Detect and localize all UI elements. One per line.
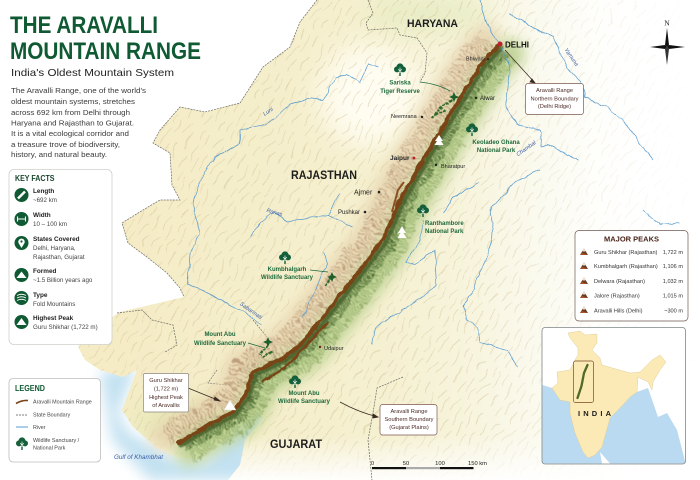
- icon: highest peak: [14, 315, 28, 329]
- inset map: India: [542, 328, 686, 464]
- panel: major peaks: MAJOR PEAKS: [604, 234, 659, 244]
- river labels: [114, 47, 579, 461]
- key fact entries: Type: [33, 292, 48, 299]
- callout: southern boundary: Southern Boundary: [384, 417, 434, 423]
- peak row: Kumbhalgarh: 1,106 m: [663, 264, 683, 270]
- river labels: Sabarmati: [238, 301, 263, 321]
- park labels: National Park: [477, 148, 516, 154]
- panel: key facts: [9, 170, 112, 344]
- subtitle: India's Oldest Mountain System: [11, 67, 174, 79]
- state boundaries: [117, 0, 427, 480]
- peak row: Aravalli Hills: ~300 m: [664, 308, 683, 314]
- protected forest patches: [260, 100, 452, 358]
- icons: parks and reserves: [263, 63, 478, 388]
- intro text: across 692 km from Delhi through: [11, 109, 130, 117]
- park labels: Ranthambore: [425, 221, 464, 227]
- sea: Gulf of Khambhat: [100, 366, 268, 480]
- mountain range: [166, 39, 510, 451]
- key fact entries: Length: [33, 188, 54, 195]
- park labels: Wildlife Sanctuary: [261, 275, 314, 281]
- panel: major peaks: [575, 230, 688, 321]
- key fact entries: States Covered: [33, 236, 80, 243]
- key fact entries: [33, 188, 98, 331]
- callout: Guru Shikhar: Guru Shikhar: [149, 378, 183, 384]
- icon: type: [14, 291, 28, 305]
- park labels: Mount Abu: [204, 332, 236, 338]
- state labels: HARYANA: [407, 18, 458, 30]
- rivers: [188, 0, 680, 367]
- legend: wildlife sanctuary: Wildlife Sanctuary /: [33, 438, 80, 444]
- river labels: Ranas: [266, 208, 283, 218]
- callout: northern boundary: [526, 84, 584, 114]
- park labels: Tiger Reserve: [380, 89, 420, 95]
- park labels: Wildlife Sanctuary: [278, 399, 331, 405]
- intro text: The Aravalli Range, one of the world's: [11, 87, 147, 95]
- peak row: Delwara: 1,032 m: [663, 279, 683, 285]
- scale bar: 50: [403, 461, 409, 467]
- peak marker: Guru Shikhar: [224, 400, 236, 410]
- city labels: Bharatpur: [441, 164, 465, 170]
- scale bar: [371, 461, 487, 469]
- scale bar: 150 km: [468, 461, 487, 467]
- peak row: Delwara: [580, 278, 683, 285]
- peak row: Kumbhalgarh: [580, 262, 683, 270]
- park labels: Keoladeo Ghana: [472, 140, 520, 146]
- key fact entries: 10 – 100 km: [33, 221, 67, 228]
- park labels: Wildlife Sanctuary: [194, 341, 247, 347]
- panel: key facts: KEY FACTS: [15, 174, 55, 183]
- intro text: a treasure trove of biodiversity,: [11, 141, 120, 149]
- icon: width: [14, 212, 28, 226]
- intro text: oldest mountain systems, stretches: [11, 98, 135, 106]
- city labels: Bhiwadi: [466, 56, 485, 62]
- peak row: Guru Shikhar: [580, 248, 683, 256]
- icon: formed: [14, 268, 28, 282]
- peak row: Delwara: Delwara (Rajasthan): [594, 279, 645, 285]
- city labels: [319, 40, 529, 352]
- intro text: Haryana and Rajasthan to Gujarat.: [11, 120, 134, 128]
- title: [10, 12, 201, 65]
- callout: southern boundary: Aravalli Range: [390, 409, 428, 415]
- inset map: India: INDIA: [578, 409, 612, 418]
- callout: southern boundary: (Gujarat Plains): [389, 425, 429, 431]
- key fact entries: Highest Peak: [33, 315, 74, 322]
- legend: state boundary: State Boundary: [33, 412, 70, 418]
- park labels: National Park: [425, 229, 464, 235]
- peak row: Aravalli Hills: Aravalli Hills (Delhi): [594, 308, 643, 314]
- peak row: Jalore: 1,015 m: [663, 294, 683, 300]
- key fact entries: Rajasthan, Gujarat: [33, 254, 85, 261]
- river labels: Chambal: [516, 140, 538, 158]
- city labels: Jaipur: [390, 155, 410, 162]
- peak row: Aravalli Hills: [580, 306, 683, 314]
- intro text: [11, 87, 147, 159]
- intro text: It is a vital ecological corridor and: [11, 130, 129, 138]
- intro text: history, and natural beauty.: [11, 151, 107, 159]
- state labels: [270, 18, 458, 451]
- callout: northern boundary: Northern Boundary: [530, 96, 579, 102]
- city labels: DELHI: [505, 40, 529, 50]
- city labels: Ajmer: [354, 190, 373, 196]
- key fact entries: Fold Mountains: [33, 301, 75, 308]
- legend: wildlife sanctuary: [16, 437, 80, 452]
- key fact entries: ~1.5 Billion years ago: [33, 277, 93, 284]
- legend: river: River: [33, 425, 46, 431]
- key fact entries: Width: [33, 212, 51, 219]
- callout: Guru Shikhar: (1,722 m): [154, 386, 178, 392]
- title: THE ARAVALLI: [10, 12, 158, 39]
- scale bar: 100: [435, 461, 445, 467]
- park labels: Mount Abu: [288, 391, 320, 397]
- peak marker: white tree near Jaipur: [434, 135, 444, 145]
- panel: legend: LEGEND: [15, 384, 45, 393]
- peak row: Jalore: Jalore (Rajasthan): [594, 294, 640, 300]
- peak row: Kumbhalgarh: Kumbhalgarh (Rajasthan): [594, 264, 658, 270]
- city labels: Udaipur: [324, 346, 344, 352]
- callout: Guru Shikhar: Highest Peak: [149, 395, 183, 401]
- peak row: Guru Shikhar: Guru Shikhar (Rajasthan): [594, 250, 658, 256]
- legend: wildlife sanctuary: National Park: [33, 446, 66, 452]
- icon: states covered: [14, 236, 28, 250]
- park labels: Sariska: [389, 80, 411, 86]
- compass: [650, 18, 685, 65]
- river labels: Yamuna: [563, 47, 579, 68]
- key fact entries: Guru Shikhar (1,722 m): [33, 324, 98, 331]
- city labels: Pushkar: [338, 210, 360, 216]
- key fact entries: Delhi, Haryana,: [33, 245, 76, 252]
- icon: length: [14, 188, 28, 202]
- peak row: Jalore: [580, 292, 683, 300]
- river labels: Luni: [262, 106, 275, 118]
- callout: Guru Shikhar: [144, 374, 188, 412]
- scale bar: 0: [371, 461, 374, 467]
- park labels: [194, 80, 520, 405]
- state labels: GUJARAT: [270, 437, 323, 451]
- callout arrows: [188, 50, 535, 418]
- city labels: Alwar: [480, 96, 495, 102]
- callout: northern boundary: (Delhi Ridge): [538, 104, 571, 110]
- panel: legend: [9, 378, 100, 462]
- legend: mountain range: Aravalli Mountain Range: [33, 400, 92, 406]
- compass: N: [664, 18, 670, 28]
- title: MOUNTAIN RANGE: [10, 38, 201, 65]
- state labels: RAJASTHAN: [291, 170, 357, 182]
- park labels: Kumbhalgarh: [268, 267, 307, 273]
- callout: southern boundary: [380, 404, 437, 435]
- key fact entries: Formed: [33, 268, 57, 275]
- key fact entries: ~692 km: [33, 197, 57, 204]
- callout: Guru Shikhar: of Aravallis: [152, 403, 180, 409]
- city labels: Neemrana: [391, 114, 418, 120]
- peak row: Guru Shikhar: 1,722 m: [663, 250, 683, 256]
- river labels: Gulf of Khambhat: [114, 455, 163, 461]
- callout: northern boundary: Aravalli Range: [536, 88, 573, 94]
